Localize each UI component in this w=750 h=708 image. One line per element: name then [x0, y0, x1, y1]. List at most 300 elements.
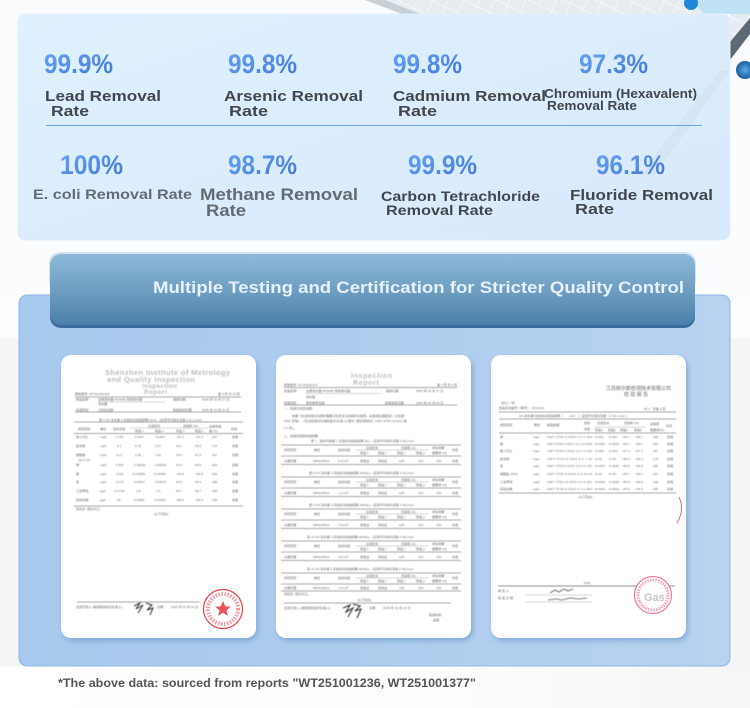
tables 1 to 5: 100 [399, 459, 404, 463]
report card 2: inspection report: 100 [436, 555, 441, 559]
report card 2: inspection report: 表 9 2/4 浓水量 3 次加标水检验结果 (4000L)，(实测平均净水流量 2.40L/min) [309, 502, 414, 507]
report card 2: inspection report: 过滤后水 [366, 541, 379, 546]
report card 3: Jiangsu testing company: <0.30 [608, 472, 616, 476]
report card 2: inspection report: 样品 2 [378, 578, 387, 583]
tables 1 to 5: 未检出 [378, 458, 387, 463]
tables 1 to 5: 合格 [452, 458, 459, 463]
report card 2: inspection report: 样品 1 [360, 578, 369, 583]
report card 3: Jiangsu testing company: <0.0001 [594, 442, 606, 446]
report card 1: Shenzhen Institute: 0.00028 [134, 463, 145, 467]
report card 2: inspection report: 依据《生活饮用水水质处理器卫生安全与功能评价规范—反渗透处理装置》(卫生部 [292, 413, 404, 418]
report card 2: inspection report: 一、检验方法及依据: [284, 406, 313, 410]
report card 3: Jiangsu testing company: 加标 [584, 420, 590, 425]
report card 3: Jiangsu testing company: 合格 [667, 471, 674, 476]
report card 3: Jiangsu testing company: GB/T 5750.6-2023 13.1 0.150 [547, 449, 592, 453]
stamp: Gas [644, 592, 665, 604]
report card 1: Shenzhen Institute: and Quality Inspection [107, 375, 195, 384]
report card 3: Jiangsu testing company: 江苏郎尔斯检测技术有限公司 [606, 385, 671, 392]
report card 2: inspection report: 去除率 (%) [401, 541, 416, 546]
report card 1: Shenzhen Institute: >99.9 [195, 498, 203, 502]
report card 1: Shenzhen Institute: 95.5 [195, 444, 201, 448]
stat: lead [44, 49, 161, 120]
report card 3: Jiangsu testing company: >99.7 [635, 435, 643, 439]
report card 1: Shenzhen Institute: 84 [117, 498, 121, 502]
report card 1: Shenzhen Institute: 加标浓度 [113, 426, 125, 431]
report card 3: Jiangsu testing company: 共 4 页第 4 页 [644, 406, 666, 411]
stat: methane: Methane Removal [200, 185, 358, 204]
report card 2: inspection report: 加标浓度 [338, 479, 350, 484]
report card 2: inspection report: 单位 [314, 575, 320, 580]
report card 1: Shenzhen Institute: 铅 [76, 479, 79, 484]
report card 1: Shenzhen Institute: 合格 [232, 488, 239, 493]
report card 3: Jiangsu testing company: <0.0002 [594, 480, 606, 484]
report card 3: Jiangsu testing company: GB/T 5750.6-2023 14.3 0.163 [547, 464, 592, 468]
report card 1: Shenzhen Institute: 99.9 [195, 463, 201, 467]
report card 1: Shenzhen Institute: >97.3 [195, 435, 203, 439]
report card 2: inspection report: 100 [418, 523, 423, 527]
tables 1 to 5: 100 [436, 459, 441, 463]
report card 3: Jiangsu testing company: mg/L [533, 487, 540, 491]
report card 2: inspection report: 2025 年 04 月 04 日 [383, 605, 410, 610]
stat: fluoride: Fluoride Removal [570, 187, 713, 204]
report card 1: Shenzhen Institute: 0.32 [135, 444, 141, 448]
report card 2: inspection report: 净化效果 [432, 541, 444, 546]
report card 3: Jiangsu testing company: <0.004 [594, 449, 604, 453]
report card 2: inspection report: 检验项目: [284, 400, 297, 405]
report card 3: Jiangsu testing company: GB/T 5750.5-2023 8.3 30.46 [547, 472, 592, 476]
report card 2: inspection report: 检验机构 [429, 612, 441, 617]
report card 3: Jiangsu testing company: 合格 [667, 486, 674, 491]
report card 3: Jiangsu testing company: 样品系统编号（单号）: 2024123 [499, 405, 544, 410]
report card 2: inspection report: 100 [418, 555, 423, 559]
report card 1: Shenzhen Institute: 测试点: 直饮水口。 [76, 506, 102, 511]
report card 3: Jiangsu testing company: GB/T 5750.5-2023 6.3 7.92 [547, 457, 592, 461]
report card 1: Shenzhen Institute: 样品 2 [155, 428, 164, 433]
report card 3: Jiangsu testing company: (以下空白) [578, 494, 592, 499]
report card 1: Shenzhen Institute: 合格 [232, 434, 239, 439]
report card 3: Jiangsu testing company: >97.3 [622, 449, 630, 453]
report card 3: Jiangsu testing company: <0.05 [594, 457, 602, 461]
report card 2: inspection report: 100 [436, 523, 441, 527]
report card 1: Shenzhen Institute: 0.00007 [134, 480, 145, 484]
report card 3: Jiangsu testing company: <0.0007 [608, 464, 620, 468]
report card 2: inspection report: 样品 2 [378, 482, 387, 487]
report card 2: inspection report: 未检出 [360, 585, 369, 590]
stat: arsenic: Arsenic Removal [224, 88, 363, 105]
report card 3: Jiangsu testing company: ≥83 [653, 435, 658, 439]
report card 1: Shenzhen Institute: 样品名称: [76, 396, 89, 402]
report card 3: Jiangsu testing company: 硝酸盐 (计N) [500, 471, 518, 476]
report card 3: Jiangsu testing company: 样品1 [595, 427, 603, 432]
report card 2: inspection report: 测定项目 [284, 575, 296, 580]
report card 2: inspection report: 100 [399, 586, 404, 590]
report card 2: inspection report: 2025 年 02 月 27 日 [416, 388, 443, 393]
stat: carbon tetrachloride: Removal Rate [386, 202, 493, 218]
report card 3: Jiangsu testing company: (线上一号) [501, 400, 515, 405]
report card 3: Jiangsu testing company: 总除率 [650, 421, 659, 426]
report card 2: inspection report: 100 [399, 491, 404, 495]
report card 1: Shenzhen Institute [61, 355, 256, 638]
report card 1: Shenzhen Institute: Inspection [142, 383, 177, 390]
report card 1: Shenzhen Institute: 2025 年 03 月 11 日 [202, 407, 229, 412]
report card 2: inspection report: 未检出 [378, 522, 387, 527]
report card 1: Shenzhen Institute: 砷 [76, 462, 79, 467]
report card 3: Jiangsu testing company: ≥85 [653, 487, 658, 491]
report card 2: inspection report: 单位 [314, 479, 320, 484]
report card 2: inspection report: 报告编号: WT251001377 [284, 382, 319, 387]
report card 1: Shenzhen Institute: ≥85 [212, 489, 217, 493]
report card 3: Jiangsu testing company: 样品2 [608, 427, 616, 432]
report card 3: Jiangsu testing company: <0.0002 [608, 480, 620, 484]
report card 3: Jiangsu testing company: ≥67 [653, 449, 658, 453]
report card 1: Shenzhen Institute: >99.8 [195, 472, 203, 476]
report card 2: inspection report: 5.1 条)。 [284, 425, 296, 430]
report card 1: Shenzhen Institute: 0.171 [116, 480, 124, 484]
tables 1 to 5: 净化效果 [432, 445, 444, 450]
report card 1: Shenzhen Institute: 99.9 [176, 463, 182, 467]
report card 2: inspection report: 去除率 (%) [401, 477, 416, 482]
report card 1: Shenzhen Institute: 合格 [232, 479, 239, 484]
report card 1: Shenzhen Institute: 0.37 [155, 444, 161, 448]
report card 1: Shenzhen Institute: 四氯化碳 [76, 497, 89, 502]
report card 2: inspection report: 量要求 (%) [432, 578, 447, 583]
report card 3: Jiangsu testing company: 样品1 [620, 427, 628, 432]
report card 2: inspection report: 判定 [452, 479, 458, 484]
report card 2: inspection report: 微生物学试验 [306, 400, 325, 405]
report card 3: Jiangsu testing company: mg/L [533, 449, 540, 453]
report card 1: Shenzhen Institute: 合格 [232, 443, 239, 448]
report card 2: inspection report: 测定项目 [284, 511, 296, 516]
report card 2: inspection report: 过滤后水 [366, 573, 379, 578]
report card 2: inspection report: (以下空白) [357, 597, 371, 602]
report card 3: Jiangsu testing company: <0.0001 [608, 487, 620, 491]
report card 2: inspection report: 过滤后水 [366, 509, 379, 514]
report card 3: Jiangsu testing company: 合格 [667, 448, 674, 453]
report card 1: Shenzhen Institute: <0.00006 [132, 472, 145, 476]
report card 2: inspection report: 过滤后水 [366, 477, 379, 482]
tables 1 to 5: 判定 [452, 447, 458, 452]
report card 1: Shenzhen Institute: 合格 [232, 452, 239, 457]
tables 1 to 5: 样品 2 [378, 450, 387, 455]
report card 3: Jiangsu testing company: >99.7 [622, 472, 630, 476]
report card 2: inspection report: 样品 1 [397, 482, 406, 487]
report card 1: Shenzhen Institute: 合格 [232, 462, 239, 467]
report card 2: inspection report: 样品 2 [416, 578, 425, 583]
tables 1 to 5: 表 7、通水开始第 1 次加标水检验结果 (0L)，(实测平均净水流量 2.42L/min) [311, 438, 414, 443]
report card 2: inspection report: 量要求 (%) [432, 482, 447, 487]
report card 2: inspection report: 100 [418, 491, 423, 495]
report card 1: Shenzhen Institute: 91.9 [195, 453, 201, 457]
stat: carbon tetrachloride: 99.9% [408, 150, 477, 180]
report card 3: Jiangsu testing company: >99.3 [635, 457, 643, 461]
stat: cadmium: Rate [398, 103, 437, 120]
stat: chromium [544, 49, 697, 113]
report card 1: Shenzhen Institute: ≥83 [212, 472, 217, 476]
report card 2: inspection report: 大肠杆菌 [284, 554, 296, 559]
report card 1: Shenzhen Institute: >97.3 [176, 435, 184, 439]
report card 1: Shenzhen Institute: 第 4 页 共 10 页 [218, 391, 240, 396]
report card 1: Shenzhen Institute: 98.7 [176, 489, 182, 493]
report card 3: Jiangsu testing company: END [584, 581, 591, 585]
report card 1: Shenzhen Institute: <0.004 [155, 435, 165, 439]
report card 1: Shenzhen Institute: >99.9 [176, 498, 184, 502]
report card 2: inspection report: 测试点: 直饮水口。 [284, 591, 310, 596]
stat: fluoride: Rate [575, 201, 614, 218]
report card 2: inspection report: 3.8×10⁵ [338, 555, 350, 559]
report card 2: inspection report: 100 [399, 555, 404, 559]
report card 2: inspection report: 100 [436, 586, 441, 590]
stat: chromium: 97.3% [579, 49, 648, 79]
report card 3: Jiangsu testing company: 过滤后水 [597, 420, 610, 425]
report card 1: Shenzhen Institute: 99.9 [195, 480, 201, 484]
stat: e. coli: E. coli Removal Rate [33, 186, 192, 202]
report card 3: Jiangsu testing company: >99.3 [622, 457, 630, 461]
report card 1: Shenzhen Institute: 样品 1 [176, 428, 185, 433]
tables 1 to 5: 去除率 (%) [401, 445, 416, 450]
report card 3: Jiangsu testing company: 判定 [666, 423, 672, 428]
report card 2: inspection report: 去除率 (%) [401, 509, 416, 514]
report card 1: Shenzhen Institute: 99.9 [176, 480, 182, 484]
report card 2: inspection report: 盖章 [433, 617, 439, 622]
report card 2: inspection report: 样品 2 [378, 546, 387, 551]
report card 2: inspection report: 样品 2 [416, 514, 425, 519]
tables 1 to 5: 过滤后水 [366, 445, 379, 450]
report card 3: Jiangsu testing company: <0.0001 [594, 487, 606, 491]
report card 3: Jiangsu testing company: 检 验 报 告 [624, 391, 648, 398]
report card 3: Jiangsu testing company: <0.0007 [594, 464, 606, 468]
report card 2: inspection report: 测定项目 [284, 479, 296, 484]
report card 1: Shenzhen Institute: 8.1 [117, 444, 122, 448]
report card 1: Shenzhen Institute: 2.8 [156, 489, 161, 493]
report card 3: Jiangsu testing company: mg/L [533, 480, 540, 484]
report card 1: Shenzhen Institute: ≥67 [212, 435, 217, 439]
report card 3: Jiangsu testing company: mg/L [533, 464, 540, 468]
report card 3: Jiangsu testing company: <0.001 [594, 435, 604, 439]
report card 2: inspection report: 二、检验项目和检验结果: [284, 433, 319, 438]
stamp [204, 590, 242, 628]
report card 2: inspection report: 加标浓度 [338, 543, 350, 548]
report card 3: Jiangsu testing company: 镉 [500, 441, 503, 446]
report card 2: inspection report: 未检出 [360, 490, 369, 495]
report card 3: Jiangsu testing company: 审 核 人 [498, 588, 509, 593]
report card 3: Jiangsu testing company: 检验依据 [547, 422, 559, 427]
stat: carbon tetrachloride [381, 150, 540, 218]
tables 1 to 5 [281, 438, 461, 464]
report card 2: inspection report: 样品 1 [397, 578, 406, 583]
report card 2: inspection report: 日期: [369, 605, 376, 610]
report card 2: inspection report: 大肠杆菌 [284, 585, 296, 590]
report card 1: Shenzhen Institute: 三氯甲烷 [76, 488, 88, 493]
report card 1: Shenzhen Institute: 2.1×10³ [114, 489, 125, 493]
report card 2: inspection report: 检验完成日期: [385, 400, 405, 405]
tables 1 to 5: 量要求 (%) [432, 450, 447, 455]
stat: lead: Rate [51, 103, 89, 120]
report card 3: Jiangsu testing company: GB/T 5750.10-2023 4.1 0.301 [547, 480, 592, 484]
report card 2: inspection report: 2025 年 04 月 03 日 [416, 400, 443, 405]
report card 3: Jiangsu testing company: ≥67 [653, 472, 658, 476]
report card 2: inspection report: 净化效果 [432, 509, 444, 514]
report card 2: inspection report: 量要求 (%) [432, 514, 447, 519]
tables 1 to 5: 100 [418, 459, 423, 463]
report card 3: Jiangsu testing company: 合格 [667, 463, 674, 468]
report card 2: inspection report: 样品 2 [378, 514, 387, 519]
report card 3: Jiangsu testing company: <0.0001 [608, 442, 620, 446]
report card 2: inspection report: 样品名称: [284, 388, 297, 393]
report card 2: inspection report: 大肠杆菌 [284, 522, 296, 527]
report card 1: Shenzhen Institute: 2025 年 04 月 04 日 [171, 604, 198, 609]
report card 2: inspection report: 样品 1 [360, 546, 369, 551]
tables 1 to 5: 加标浓度 [338, 447, 350, 452]
tables 1 to 5: 未检出 [360, 458, 369, 463]
stat: methane [200, 150, 358, 220]
report card 1: Shenzhen Institute: 0.00007 [155, 480, 166, 484]
report card 2: inspection report: 合格 [452, 490, 459, 495]
report card 2: inspection report: 样品 1 [360, 482, 369, 487]
report card 2: inspection report: 样品 1 [397, 514, 406, 519]
report card 3: Jiangsu testing company: ≥83 [653, 442, 658, 446]
panel: removal rates [18, 14, 730, 240]
report card 3: Jiangsu testing company: mg/L [533, 457, 540, 461]
tables 1 to 5: 9.4×10⁵ [338, 459, 350, 463]
report card 1: Shenzhen Institute: 合格 [232, 471, 239, 476]
report card 3: Jiangsu testing company: <0.001 [608, 435, 618, 439]
footnote: *The above data: sourced from reports "WT251001236, WT251001377" [58, 678, 476, 690]
report card 2: inspection report: 去除率 (%) [401, 573, 416, 578]
report card 3: Jiangsu testing company: >99.9 [635, 480, 643, 484]
report card 2: inspection report: 表 11 4/4 浓水量 5 次加标水检验结果 (8000L)，(实测平均净水流量 2.40L/min) [307, 566, 414, 571]
report card 1: Shenzhen Institute: <0.004 [134, 435, 144, 439]
report card 3: Jiangsu testing company [491, 355, 686, 638]
report card 1: Shenzhen Institute: 测定项目 [78, 426, 90, 431]
report card 2: inspection report: Report [353, 380, 380, 387]
report card 2: inspection report: 抽样日期: [386, 388, 399, 393]
report card 1: Shenzhen Institute: ≥67 [212, 453, 217, 457]
report card 1: Shenzhen Institute: 去除率 (%) [183, 423, 198, 428]
report card 2: inspection report: 100 [399, 523, 404, 527]
report card 2: inspection report: 未检出 [378, 554, 387, 559]
report card 1: Shenzhen Institute: 抽样日期: [173, 396, 186, 402]
report card 2: inspection report: Inspection [351, 373, 392, 380]
report card 3: Jiangsu testing company: 浓度 [584, 426, 590, 431]
banner heading: Multiple Testing and Certification for Stricter Quality Control [153, 278, 684, 297]
report card 2: inspection report: 合格 [452, 522, 459, 527]
stat: fluoride: 96.1% [596, 150, 665, 180]
stat: arsenic: Rate [229, 103, 268, 120]
report card 2: inspection report: 判定 [452, 543, 458, 548]
report card 2: inspection report: 判定 [452, 575, 458, 580]
report card 1: Shenzhen Institute: <0.0050 [133, 498, 145, 502]
report card 1: Shenzhen Institute: 2.8 [136, 489, 141, 493]
report card 2: inspection report: 单位 [314, 543, 320, 548]
report card 3: Jiangsu testing company: 测定项目 [500, 422, 512, 427]
report card 2: inspection report: MPN/100mL [313, 586, 330, 590]
report card 1: Shenzhen Institute: 2.52 [155, 453, 161, 457]
report card 3: Jiangsu testing company: <0.05 [608, 457, 616, 461]
report card 3: Jiangsu testing company: mg/L [533, 472, 540, 476]
report card 3: Jiangsu testing company: mg/L [533, 435, 540, 439]
report card 2: inspection report: MPN/100mL [313, 555, 330, 559]
report card 2: inspection report: 未检出 [378, 585, 387, 590]
report card 2: inspection report: 净水器 [306, 394, 315, 399]
report card 1: Shenzhen Institute: 总除率量 [209, 424, 221, 428]
report card 2: inspection report: MPN/100mL [313, 491, 330, 495]
report card 1: Shenzhen Institute: mg/L [100, 472, 107, 476]
report card 3: Jiangsu testing company: ≥90 [653, 480, 658, 484]
report card 3: Jiangsu testing company: 砷 [500, 434, 503, 439]
report card 2: inspection report: 法定代表人 (或授权的技术负责人): [284, 605, 331, 610]
report card 2: inspection report: 全屋净水器 RO5000 家用净水器 [306, 388, 350, 393]
report card 1: Shenzhen Institute: 检验项目: [76, 407, 89, 412]
tables 1 to 5: 测定项目 [284, 447, 296, 452]
seal fragment [677, 497, 682, 523]
report card 1: Shenzhen Institute: 单位 [100, 426, 106, 431]
report card 1: Shenzhen Institute: 全屋净水器 RO5000 家用净水器 [98, 396, 142, 402]
report card 1: Shenzhen Institute: 合格 [232, 497, 239, 502]
report card 3: Jiangsu testing company: >99.7 [622, 442, 630, 446]
tables 1 to 5: 样品 1 [397, 450, 406, 455]
report card 1: Shenzhen Institute: 法定代表人 (或授权的技术负责人): [76, 604, 123, 609]
report card 1: Shenzhen Institute: 样品 1 [135, 428, 144, 433]
report card 1: Shenzhen Institute: 2025 年 02 月 27 日 [202, 396, 229, 402]
report card 1: Shenzhen Institute: μg/L [100, 489, 106, 493]
report card 1: Shenzhen Institute: mg/L [100, 453, 107, 457]
report card 1: Shenzhen Institute: 2.36 [135, 453, 141, 457]
report card 1: Shenzhen Institute: mg/L [100, 444, 107, 448]
report card 1: Shenzhen Institute: 日期: [157, 604, 164, 609]
report card 1: Shenzhen Institute: 硝酸盐 [76, 452, 85, 457]
report card 2: inspection report: 未检出 [360, 554, 369, 559]
report card 2: inspection report: 第 4 页 共 6 页 [437, 382, 457, 387]
report card 1: Shenzhen Institute: 净水器 [98, 401, 107, 406]
tables 1 to 5: 样品 2 [416, 450, 425, 455]
report card 3: Jiangsu testing company: 合格 [667, 479, 674, 484]
report card 1: Shenzhen Institute: mg/L [100, 435, 107, 439]
report card 3: Jiangsu testing company: GB/T 5750.8-2023 4.1 0.083 [547, 487, 592, 491]
report card 1: Shenzhen Institute: (以下空白) [154, 511, 168, 516]
report card 2: inspection report: 未检出 [378, 490, 387, 495]
stat: e. coli: 100% [60, 150, 123, 180]
stat: lead: Lead Removal [45, 88, 161, 105]
report card 2: inspection report: 样品 1 [397, 546, 406, 551]
report card 1: Shenzhen Institute: μg/L [100, 498, 106, 502]
report card 2: inspection report: 3.4×10⁵ [338, 586, 350, 590]
stat: cadmium [393, 49, 546, 120]
report card 1: Shenzhen Institute: 0.302 [116, 463, 124, 467]
report card 2: inspection report: 测定项目 [284, 543, 296, 548]
report card 1: Shenzhen Institute: 过滤后水 [148, 423, 161, 428]
report card 2: inspection report: 未检出 [360, 522, 369, 527]
report card 2: inspection report: 100 [418, 586, 423, 590]
panel: certification reports [19, 252, 730, 690]
report card 2: inspection report: 100 [436, 491, 441, 495]
report card 1: Shenzhen Institute: (以 N 计) [78, 457, 90, 462]
report card 1: Shenzhen Institute: 31.2 [116, 453, 122, 457]
report card 3: Jiangsu testing company: <0.004 [608, 449, 618, 453]
report card 1: Shenzhen Institute: <0.0050 [154, 498, 166, 502]
report card 2: inspection report: 大肠杆菌 [284, 490, 296, 495]
report card 3: Jiangsu testing company: 样品2 [634, 427, 642, 432]
report card 2: inspection report: 1.1×10⁶ [338, 491, 350, 495]
report card 2: inspection report: 表 8 1/4 浓水量 2 次加标水检验结果 (2000L)，(实测平均净水流量 2.41L/min) [309, 470, 414, 475]
report card 1: Shenzhen Institute: 0.151 [116, 435, 124, 439]
report card 3: Jiangsu testing company: >99.7 [635, 472, 643, 476]
report card 1: Shenzhen Institute: Shenzhen Institute of Metrology [105, 368, 231, 377]
report card 1: Shenzhen Institute: 报告编号: WT251001236 [75, 391, 110, 396]
report card 3: Jiangsu testing company: 4/4 浓水量5次加标水检验结果（ L/m³ ）实测平均净水流量（ 2.41 L/min ） [519, 413, 629, 418]
report card 1: Shenzhen Institute: ≥83 [212, 463, 217, 467]
stat: cadmium: Cadmium Removal [393, 88, 546, 105]
report card 2: inspection report: MPN/100mL [313, 523, 330, 527]
